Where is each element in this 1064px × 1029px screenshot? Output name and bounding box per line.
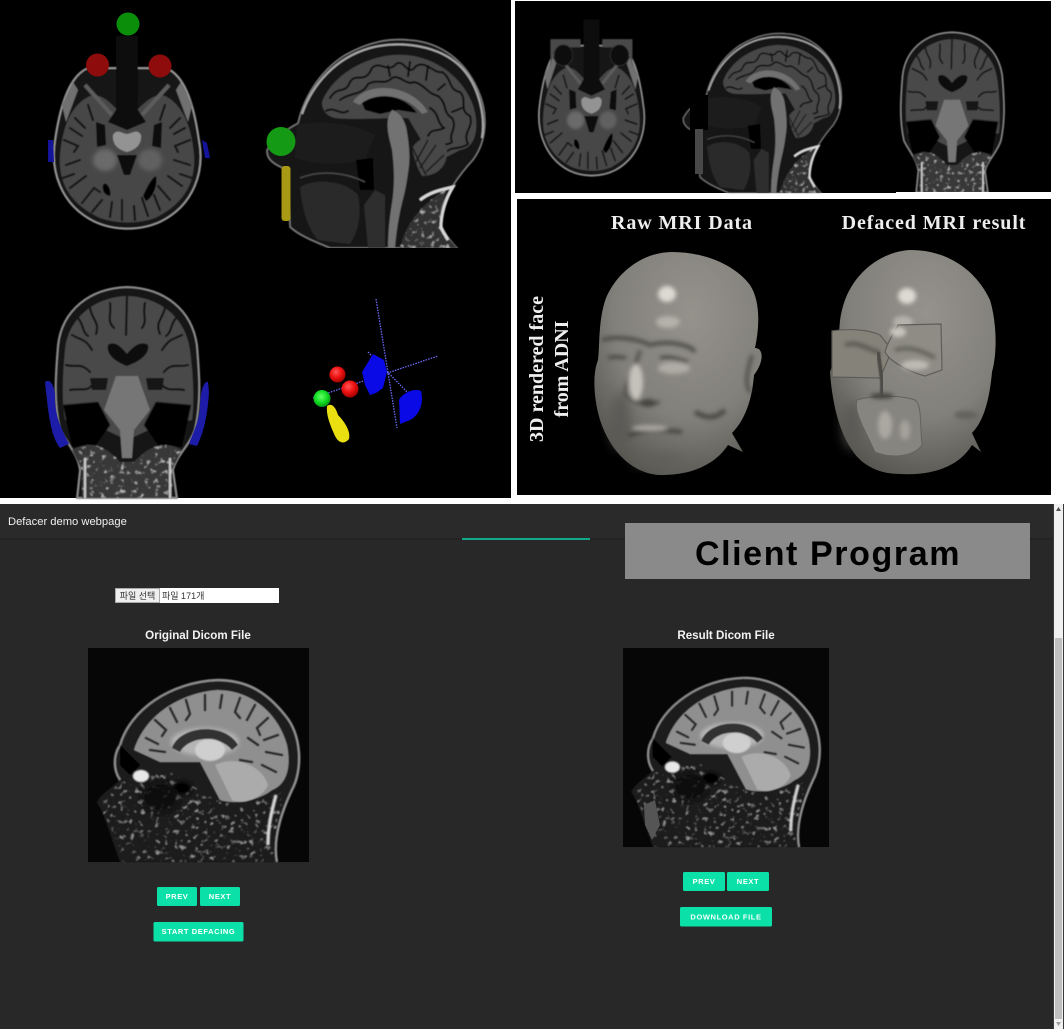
file input: 파일 171개	[162, 591, 204, 601]
button: result PREV	[683, 872, 725, 891]
file input	[115, 588, 279, 603]
callout: Client Program	[625, 523, 1030, 579]
sagittal landmarks: nose and chin	[266, 127, 296, 221]
panel: annotated MRI landmarks	[0, 0, 511, 498]
callout: Client Program: Client Program	[695, 535, 961, 573]
heading: Raw MRI Data: Raw MRI Data	[611, 212, 753, 234]
eye mask patch	[832, 324, 942, 378]
panel: 3D rendered face comparison	[517, 199, 1051, 495]
button: NEXT	[200, 887, 240, 906]
axial MRI slice	[54, 36, 201, 229]
button: result NEXT: NEXT	[737, 877, 759, 886]
button: DOWNLOAD FILE	[680, 907, 772, 926]
coronal MRI slice	[56, 287, 199, 498]
rotated side label: 3D rendered face	[526, 296, 548, 442]
defaced axial slice	[539, 20, 644, 176]
original DICOM image	[88, 648, 309, 862]
defaced coronal slice	[901, 32, 1004, 192]
heading: Original Dicom File: Original Dicom File	[145, 629, 251, 642]
rotated side label: from ADNI	[551, 320, 573, 417]
button: result PREV: PREV	[693, 877, 715, 886]
panel: defaced MRI slices	[515, 1, 1051, 195]
panel: client program web page	[0, 504, 1054, 1029]
button: START DEFACING: START DEFACING	[162, 927, 235, 936]
axial landmarks: eyes, nose and ears	[48, 12, 210, 162]
mouth mask patch	[856, 393, 922, 456]
heading: Result Dicom File: Result Dicom File	[677, 629, 775, 642]
button: NEXT: NEXT	[209, 892, 231, 901]
scrollbar	[1053, 504, 1064, 1029]
button: PREV: PREV	[166, 892, 188, 901]
button: DOWNLOAD FILE: DOWNLOAD FILE	[690, 912, 762, 922]
app bar	[0, 504, 1054, 540]
sagittal MRI slice	[267, 39, 485, 250]
button: START DEFACING	[154, 922, 244, 942]
3D landmark model	[313, 299, 438, 442]
defaced sagittal slice	[683, 33, 842, 195]
button: PREV	[157, 887, 197, 906]
app bar: Defacer demo webpage	[8, 516, 127, 528]
raw 3D head	[594, 252, 762, 475]
button: result NEXT	[727, 872, 769, 891]
defaced 3D head	[830, 250, 996, 474]
file input: 파일 선택	[120, 591, 155, 601]
result DICOM image	[623, 648, 829, 847]
heading: Defaced MRI result: Defaced MRI result	[842, 212, 1026, 234]
coronal landmarks: ears	[45, 381, 209, 448]
